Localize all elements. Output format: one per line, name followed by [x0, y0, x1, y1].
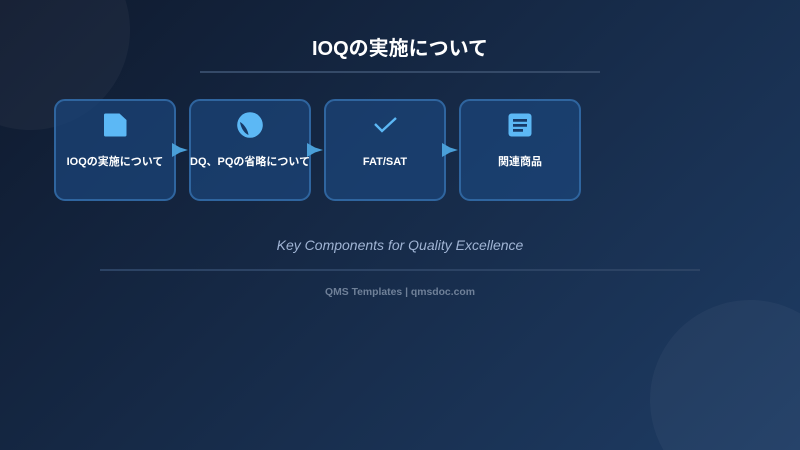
- icon: document: [104, 114, 126, 136]
- icon: check mark: [374, 117, 397, 132]
- panel: step 2: [189, 99, 311, 201]
- panel: step 1: [54, 99, 176, 201]
- panel: step 3: [324, 99, 446, 201]
- icon: text document: [508, 114, 532, 136]
- footer divider: [100, 269, 700, 271]
- decorative circle: top left: [0, 0, 130, 130]
- label: step 4: 関連商品: [498, 156, 542, 168]
- arrow: step 2 to 3: [307, 143, 323, 157]
- label: step 3: FAT/SAT: [363, 156, 407, 168]
- subtitle: Key Components for Quality Excellence: [277, 237, 523, 253]
- panel: step 4: [459, 99, 581, 201]
- arrow: step 3 to 4: [442, 143, 458, 157]
- arrow: step 1 to 2: [172, 143, 188, 157]
- footer: QMS Templates | qmsdoc.com: [325, 287, 475, 298]
- label: step 2: DQ、PQの省略について: [190, 156, 310, 168]
- title: IOQの実施について: [312, 38, 488, 60]
- title underline: [200, 71, 600, 73]
- label: step 1: IOQの実施について: [67, 156, 163, 168]
- decorative circle: bottom right: [650, 300, 800, 450]
- icon: disc with leaf: [237, 112, 263, 138]
